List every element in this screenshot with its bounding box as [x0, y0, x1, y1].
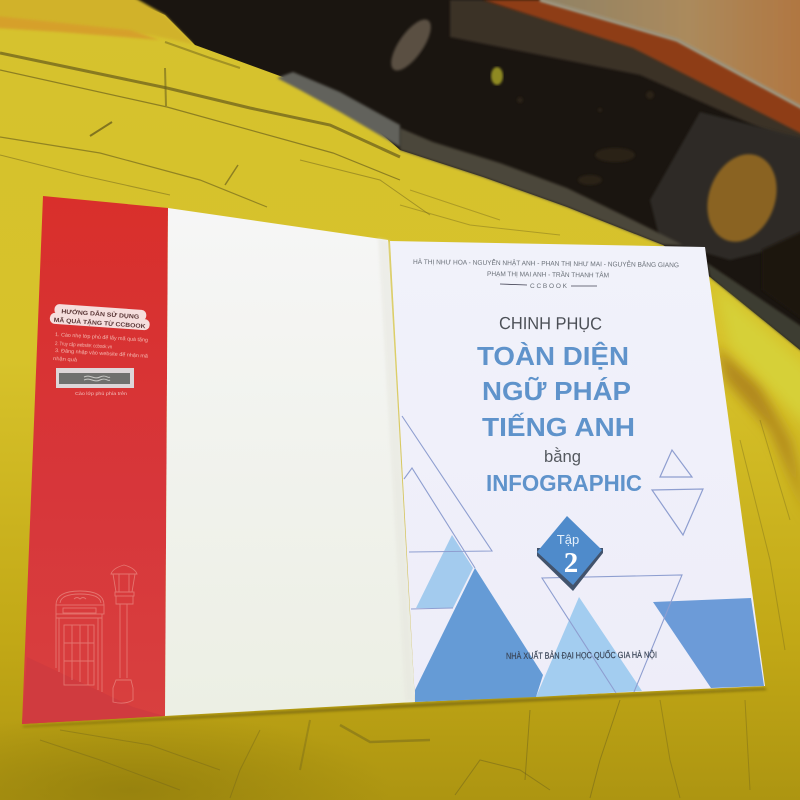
panel: right title page — [390, 241, 765, 702]
outline triangles — [402, 416, 703, 693]
publisher brand — [500, 283, 597, 290]
dark lower corner of the flap — [22, 657, 164, 724]
authors: PHẠM THỊ MAI ANH - TRẦN THANH TÂM — [487, 268, 609, 279]
sticker: usage guide heading: HƯỚNG DẪN SỬ DỤNG — [61, 307, 140, 321]
main title: NGỮ PHÁP — [482, 376, 631, 406]
usage steps — [53, 331, 148, 363]
icon: phone booth outline — [56, 591, 104, 692]
usage steps: 2. Truy cập website: ccbook.vn — [55, 341, 112, 350]
badge: volume 2 diamond — [537, 516, 603, 591]
icon: street lamp outline — [111, 565, 137, 703]
authors: HÀ THỊ NHƯ HOA - NGUYỄN NHẬT ANH - PHAN THỊ NHƯ MAI - NGUYỄN BĂNG GIANG — [413, 257, 679, 269]
triangle: mid blue top left — [416, 535, 473, 608]
badge: volume 2 diamond: 2 — [564, 547, 578, 579]
publisher line: NHÀ XUẤT BẢN ĐẠI HỌC QUỐC GIA HÀ NỘI — [506, 649, 657, 661]
publisher brand: CCBOOK — [530, 283, 568, 290]
authors — [413, 257, 679, 279]
note under code box: Cào lớp phủ phía trên — [75, 390, 128, 396]
triangle: light blue centre — [536, 597, 642, 697]
word: infographic: INFOGRAPHIC — [486, 470, 642, 496]
sticker: usage guide heading — [49, 304, 151, 330]
book shadow — [22, 688, 767, 727]
word: bang: bằng — [544, 447, 581, 466]
sticker: usage guide heading: MÃ QUÀ TẶNG TỪ CCBOOK — [53, 317, 146, 330]
scratch-off code box — [56, 368, 134, 388]
triangle: large blue left — [415, 568, 543, 702]
main title: TOÀN DIỆN — [477, 341, 629, 371]
usage steps: 3. Đăng nhập vào website để nhận mã — [55, 347, 148, 360]
panel: blank left page — [165, 208, 415, 716]
background: dark soil and wood — [138, 0, 800, 350]
page gutter shade — [378, 238, 415, 702]
heading: chinh phuc: CHINH PHỤC — [499, 313, 602, 334]
main title — [477, 341, 635, 442]
triangle: blue right corner — [653, 598, 764, 688]
badge: volume 2 diamond: Tập — [557, 532, 579, 547]
usage steps: nhận quà — [53, 356, 77, 363]
main title: TIẾNG ANH — [482, 412, 635, 442]
usage steps: 1. Cào nhẹ lớp phủ để lấy mã quà tặng — [55, 331, 148, 344]
panel: red inside flap — [22, 196, 168, 724]
